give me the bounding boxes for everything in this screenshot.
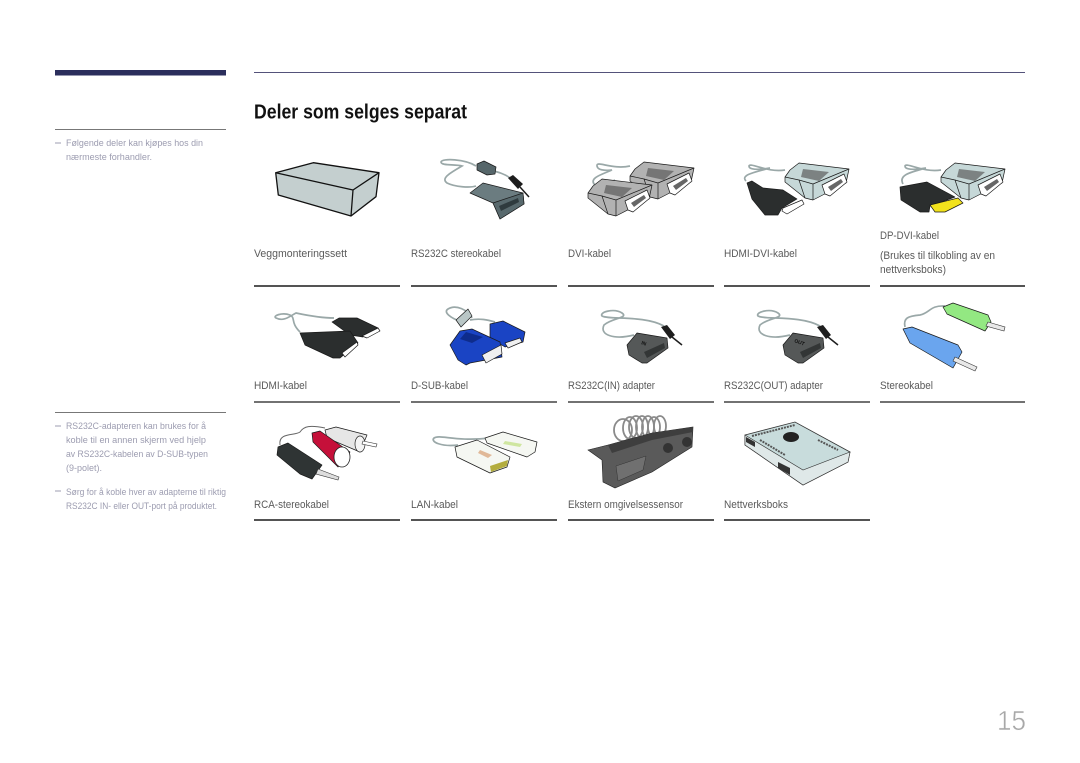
note: adapter info <box>55 412 226 511</box>
item: Nettverksboks <box>724 422 870 520</box>
icon: external sensor <box>588 416 693 488</box>
item: Ekstern omgivelsessensor <box>568 416 714 520</box>
label: Veggmonteringssett <box>254 248 347 260</box>
item: Veggmonteringssett <box>254 163 400 286</box>
note <box>880 250 995 276</box>
item: RS232C(OUT) adapter <box>724 311 870 402</box>
page number: 15 <box>997 705 1026 736</box>
label: LAN-kabel <box>411 499 458 511</box>
icon: network box <box>745 422 850 485</box>
icon: RS232C OUT adapter <box>758 311 838 363</box>
icon: RS232C IN adapter: IN <box>640 340 647 348</box>
item: DVI-kabel <box>568 162 714 286</box>
icon: RS232C IN adapter <box>602 311 682 363</box>
item: RS232C stereokabel <box>411 160 557 286</box>
label: HDMI-kabel <box>254 380 307 392</box>
note: adapter info: koble til en annen skjerm ved hjelp <box>66 435 206 445</box>
icon: RCA stereo cable <box>277 426 377 480</box>
top rule <box>254 72 1025 74</box>
icon: LAN cable <box>433 432 537 473</box>
item: RCA-stereokabel <box>254 426 400 520</box>
label: RCA-stereokabel <box>254 499 329 511</box>
label: Stereokabel <box>880 380 933 392</box>
note: (Brukes til tilkobling av en <box>880 250 995 262</box>
note: purchase info <box>55 130 226 162</box>
note: adapter info: Sørg for å koble hver av adapterne til riktig <box>66 487 226 497</box>
note: adapter info: RS232C IN- eller OUT-port på produktet. <box>66 501 217 511</box>
icon: HDMI cable <box>275 313 380 358</box>
label: RS232C stereokabel <box>411 248 501 260</box>
icon: DP-DVI cable <box>900 163 1005 212</box>
label: Ekstern omgivelsessensor <box>568 499 683 511</box>
icon: stereo cable <box>903 303 1005 371</box>
note: purchase info: Følgende deler kan kjøpes hos din <box>66 138 203 148</box>
label: Nettverksboks <box>724 499 788 511</box>
icon: DVI cable <box>588 162 694 216</box>
title: Deler som selges separat <box>254 102 467 124</box>
sidebar accent bar <box>55 70 226 76</box>
note: adapter info: (9-polet). <box>66 463 102 473</box>
icon: RS232C stereo cable <box>441 160 529 219</box>
icon: D-SUB cable <box>446 307 525 365</box>
item: D-SUB-kabel <box>411 307 557 402</box>
icon: HDMI-DVI cable <box>745 163 849 215</box>
note: adapter info: RS232C-adapteren kan brukes for å <box>66 421 207 431</box>
item: RS232C(IN) adapter <box>568 311 714 402</box>
item: LAN-kabel <box>411 432 557 520</box>
label: RS232C(OUT) adapter <box>724 380 823 392</box>
label: D-SUB-kabel <box>411 380 468 392</box>
item: DP-DVI-kabel <box>880 163 1025 286</box>
label: DVI-kabel <box>568 248 611 260</box>
note: adapter info: av RS232C-kabelen av D-SUB-typen <box>66 449 208 459</box>
label: RS232C(IN) adapter <box>568 380 655 392</box>
icon: RS232C OUT adapter: OUT <box>793 338 805 347</box>
icon: wall mount box <box>276 163 379 216</box>
item: HDMI-kabel <box>254 313 400 402</box>
label: DP-DVI-kabel <box>880 230 939 242</box>
note: purchase info: nærmeste forhandler. <box>66 152 152 162</box>
item: HDMI-DVI-kabel <box>724 163 870 286</box>
item: Stereokabel <box>880 303 1025 402</box>
label: HDMI-DVI-kabel <box>724 248 797 260</box>
note: nettverksboks) <box>880 264 946 276</box>
